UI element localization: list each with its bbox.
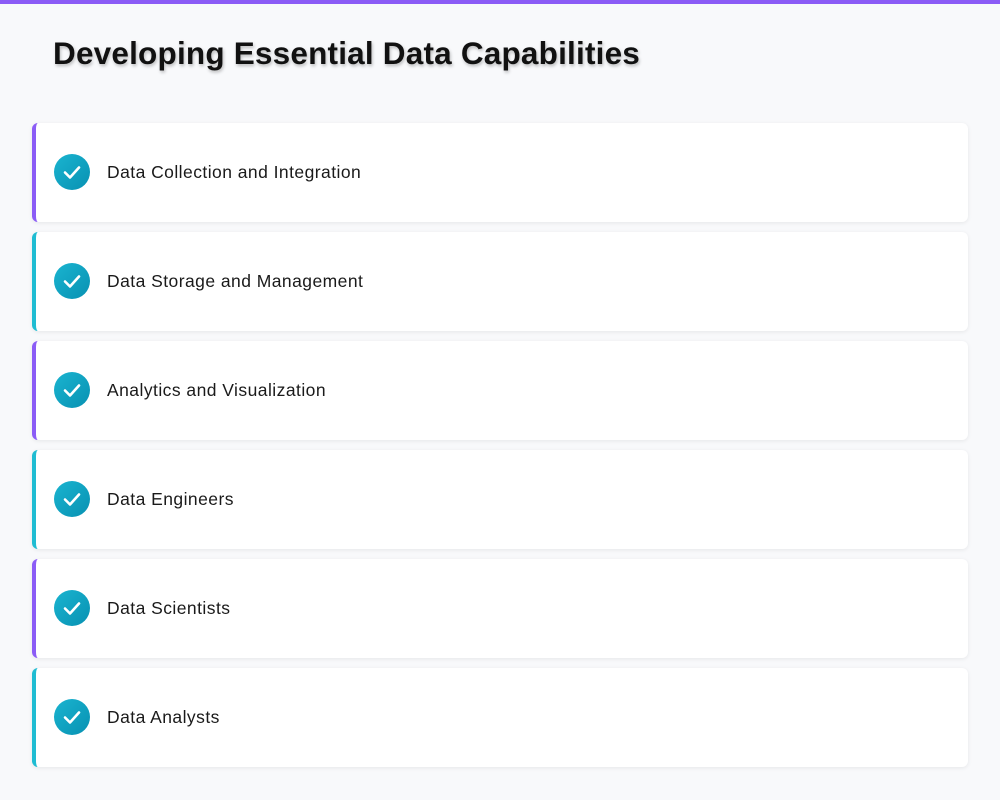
card: analytics xyxy=(32,341,968,440)
card: data collection: Data Collection and Integration xyxy=(107,162,361,182)
title: Developing Essential Data Capabilities xyxy=(53,35,640,71)
card: data scientists xyxy=(32,559,968,658)
card: data engineers xyxy=(32,450,968,549)
card: data collection xyxy=(32,123,968,222)
card: data analysts: Data Analysts xyxy=(107,707,220,727)
card: data scientists: Data Scientists xyxy=(107,598,230,618)
card: data engineers: Data Engineers xyxy=(107,489,234,509)
card: data analysts xyxy=(32,668,968,767)
card: data storage: Data Storage and Management xyxy=(107,271,363,291)
card: data storage xyxy=(32,232,968,331)
card: analytics: Analytics and Visualization xyxy=(107,380,326,400)
